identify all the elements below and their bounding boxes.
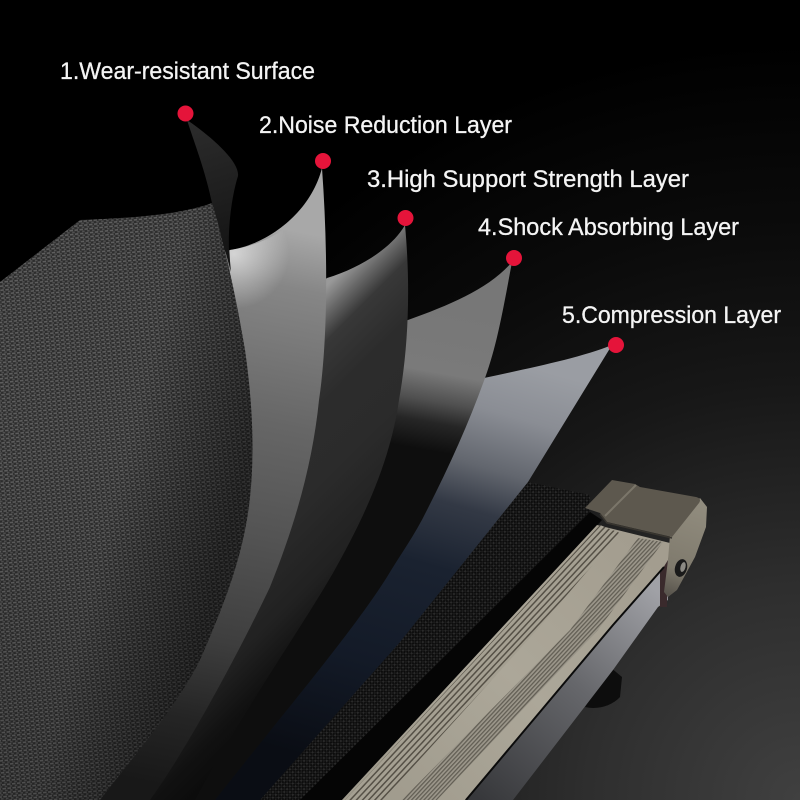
icon: rubber foot xyxy=(585,667,622,708)
layer 5 sheet xyxy=(170,345,612,800)
rail end reflection xyxy=(660,560,668,607)
cap shadow line xyxy=(600,514,672,538)
layer 2 corner glow xyxy=(230,225,290,310)
running belt xyxy=(260,482,590,800)
icon: bolt xyxy=(673,558,689,578)
layer 1 back flap xyxy=(187,120,238,272)
layer 1 mesh sheet xyxy=(0,203,252,800)
label 1: 1.Wear-resistant Surface xyxy=(60,58,315,85)
label 2: 2.Noise Reduction Layer xyxy=(259,112,512,139)
rail edge line xyxy=(466,567,664,800)
marker 2 xyxy=(315,153,331,169)
layer 1 edge shading xyxy=(0,203,252,800)
gap beneath belt xyxy=(300,512,602,800)
layer 2 surface xyxy=(60,168,326,800)
layer 2 sheet xyxy=(60,168,326,800)
layer 1 surface xyxy=(0,203,252,800)
marker 5 xyxy=(608,337,624,353)
layer 1 lower shading xyxy=(0,450,252,800)
cap top xyxy=(585,480,700,537)
bolt body xyxy=(673,558,689,578)
marker 4 xyxy=(506,250,522,266)
label 5: 5.Compression Layer xyxy=(562,302,781,329)
cap side xyxy=(664,498,707,597)
marker 3 xyxy=(398,210,414,226)
marker 1 xyxy=(178,106,194,122)
cap ridge xyxy=(605,485,636,516)
bolt highlight xyxy=(679,562,687,572)
frame rail xyxy=(342,525,670,800)
rail side face xyxy=(465,562,668,800)
rail rib band one xyxy=(345,525,620,800)
rail top face xyxy=(342,525,670,800)
rail rib band two xyxy=(402,538,663,800)
layer 4 sheet xyxy=(100,262,512,800)
layer 3 sheet xyxy=(80,225,408,800)
label 3: 3.High Support Strength Layer xyxy=(367,166,689,193)
end cap xyxy=(585,480,707,597)
label 4: 4.Shock Absorbing Layer xyxy=(478,214,739,241)
